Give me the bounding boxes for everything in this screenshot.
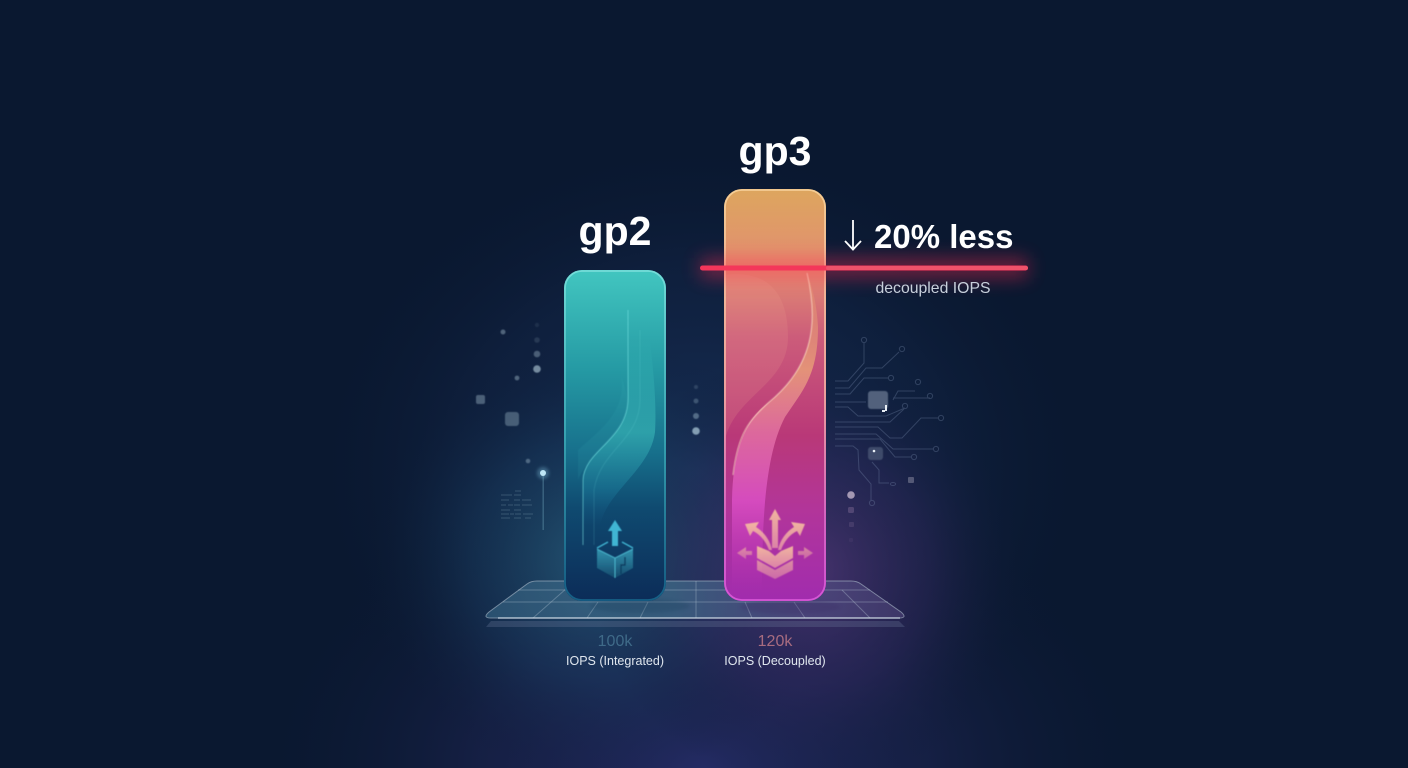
platform reflection slab <box>486 621 905 627</box>
gp3 swoosh ribbons <box>726 272 818 562</box>
callout: 20% less: 20% less <box>874 218 1013 255</box>
gp3 bar <box>724 189 826 601</box>
small code text block <box>501 491 533 518</box>
decorative dots left of gp2 <box>476 323 541 463</box>
gp2 swoosh ribbons <box>578 310 655 545</box>
icon: integrated cube with up arrow <box>597 520 633 578</box>
decorative dots between bars <box>692 385 700 435</box>
label: IOPS (Decoupled): IOPS (Decoupled) <box>724 654 826 668</box>
red threshold line <box>700 258 1028 278</box>
icon: decoupled layers with diverging arrows <box>737 509 813 579</box>
value: 100k: 100k <box>598 633 633 650</box>
label: IOPS (Integrated): IOPS (Integrated) <box>566 654 664 668</box>
platform <box>486 581 905 627</box>
icon: down arrow <box>845 220 861 250</box>
data node with vertical line <box>537 467 549 530</box>
bar shadows on platform <box>590 599 690 613</box>
circuit chips and dots <box>847 391 914 542</box>
callout subtext: decoupled IOPS <box>875 280 991 297</box>
heading: gp3: gp3 <box>739 128 811 174</box>
gp2 bar <box>564 270 666 601</box>
value: 120k: 120k <box>758 633 793 650</box>
heading: gp2: gp2 <box>579 208 651 254</box>
circuit traces right of gp3 <box>835 337 944 506</box>
platform surface <box>486 581 904 618</box>
